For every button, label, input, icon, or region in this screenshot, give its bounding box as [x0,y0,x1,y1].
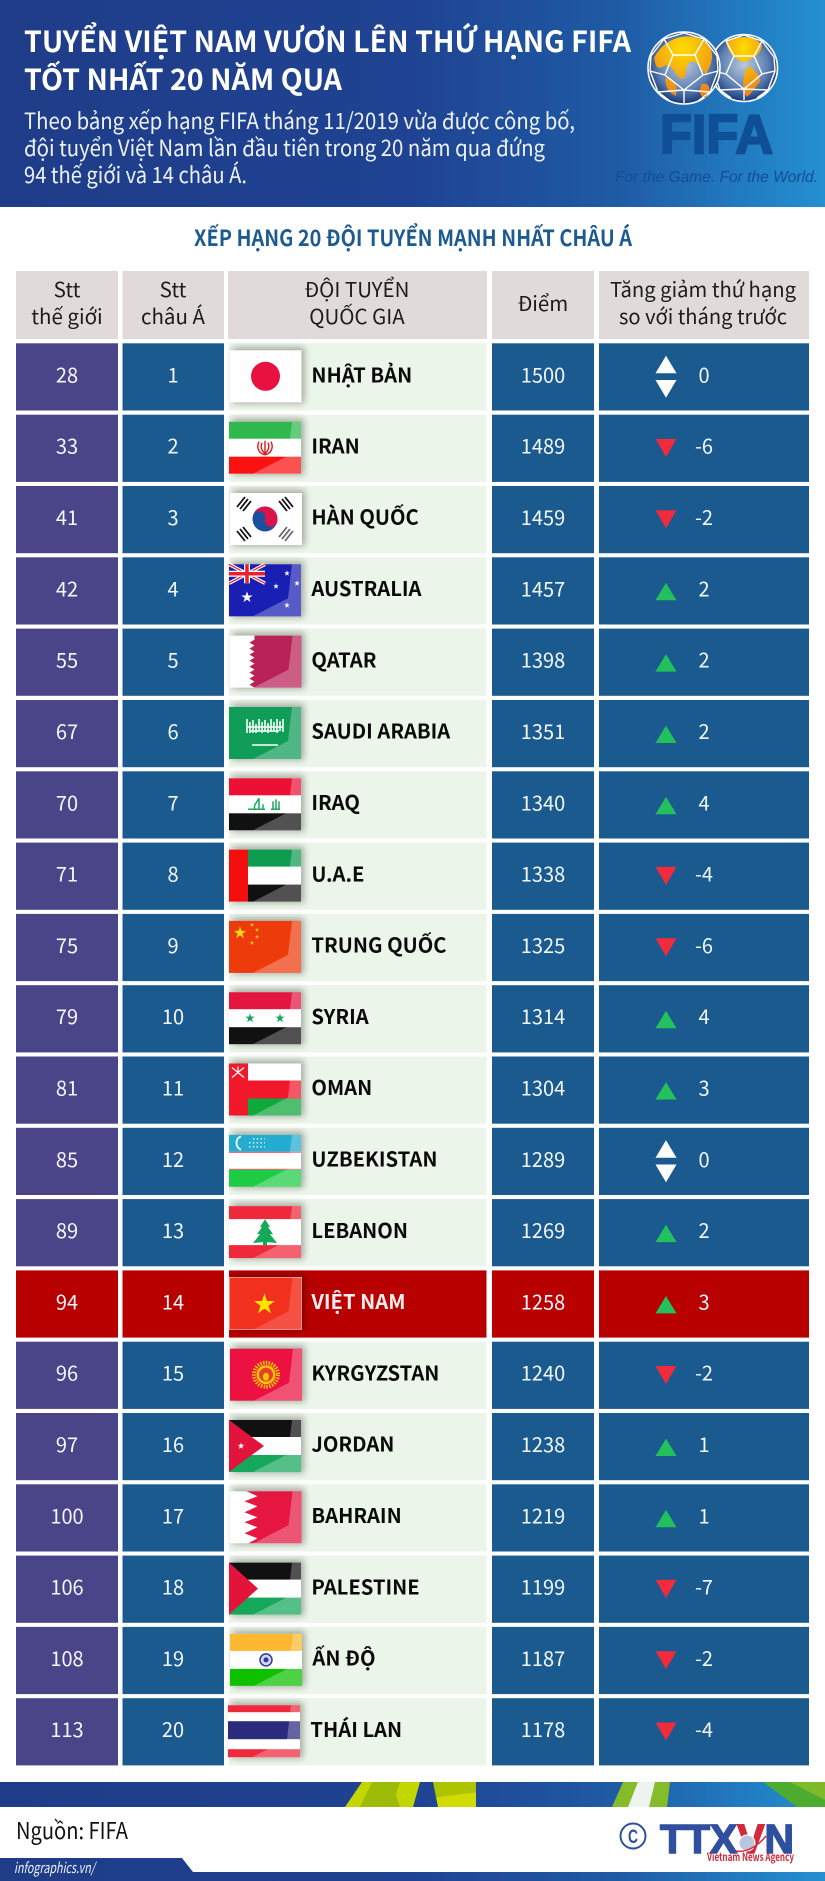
row: Qatar: 2 [698,645,710,674]
row: Iran [16,415,809,482]
row: Nhật Bản: 28 [56,359,78,388]
row: Iran: 1489 [521,431,565,460]
row: Uzbekistan: 12 [162,1144,184,1173]
bottom strip with site tab [0,1857,825,1881]
row: U.A.E: U.A.E [311,858,364,887]
table header: Stt [160,273,187,303]
row: Saudi Arabia [16,700,809,767]
flag: Jordan [229,1417,304,1473]
row: Uzbekistan: 85 [56,1144,78,1173]
row: Ấn Độ: 108 [50,1643,84,1672]
row: Oman: 81 [56,1072,78,1102]
row: Uzbekistan: UZBEKISTAN [311,1144,437,1173]
row: Iraq: 70 [56,787,78,816]
row: U.A.E: 71 [56,859,78,888]
agency name: Vietnam News Agency [706,1849,794,1865]
copyright mark [620,1824,646,1848]
arrow: up [656,1011,676,1028]
row: Nhật Bản: 0 [698,359,710,388]
table header: châu Á [141,300,205,330]
row: Ấn Độ: 1187 [521,1643,565,1672]
flag: Vietnam [230,1274,304,1330]
arrow: down [656,1722,676,1740]
row: Hàn Quốc: 1459 [521,502,565,531]
flag: UAE [229,847,304,903]
row: Qatar: QATAR [311,644,377,673]
row: Việt Nam (highlighted) [16,1270,809,1338]
row: Uzbekistan [16,1128,809,1195]
row: Australia: 4 [167,573,179,602]
arrow: up [656,1082,676,1100]
row: Iran: IRAN [311,430,360,459]
row: Syria: 1314 [521,1001,565,1030]
row: Trung Quốc: 1325 [521,930,565,959]
row: Trung Quốc: 9 [167,930,179,959]
row: Lebanon: 89 [56,1215,78,1244]
row: Bahrain: 17 [162,1500,184,1529]
title [24,19,631,99]
row: U.A.E: 8 [167,859,179,888]
row: Thái Lan: 20 [162,1714,184,1743]
row: Syria: 79 [56,1001,78,1030]
title: TỐT NHẤT 20 NĂM QUA [24,57,342,99]
row: Trung Quốc: TRUNG QUỐC [311,930,447,959]
arrow: up [656,1439,676,1456]
row: Việt Nam (highlighted): 94 [56,1286,78,1315]
row: Thái Lan [16,1698,809,1765]
arrow: down [656,1580,676,1598]
row: Thái Lan: THÁI LAN [310,1714,402,1743]
flag: Uzbekistan [229,1132,304,1188]
row: Lebanon [16,1199,809,1266]
row: Qatar: 1398 [521,645,565,674]
row: Jordan: 1 [698,1429,710,1458]
row: Thái Lan: 1178 [521,1714,565,1743]
row: Palestine: 106 [50,1572,84,1601]
row: Australia: 2 [698,573,710,602]
row: Jordan [16,1413,809,1480]
row: Nhật Bản: NHẬT BẢN [311,359,412,388]
row: Palestine: 18 [162,1572,184,1601]
row: Saudi Arabia: SAUDI ARABIA [311,716,451,745]
row: Iraq [16,771,809,838]
row: Palestine: 1199 [521,1572,565,1601]
FIFA slogan: For the Game. For the World. [615,169,818,186]
row: Palestine: PALESTINE [311,1571,420,1600]
row: Trung Quốc: -6 [695,930,713,959]
bottom strip with site tab: infographics.vn/ [14,1857,97,1878]
row: Australia: AUSTRALIA [310,573,423,602]
row: Trung Quốc [16,914,809,981]
row: Nhật Bản: 1500 [521,359,565,388]
flag: Syria [229,989,304,1045]
row: Nhật Bản [16,343,809,410]
row: Kyrgyzstan: KYRGYZSTAN [311,1357,439,1386]
row: Syria: 10 [162,1001,184,1030]
intro text: Theo bảng xếp hạng FIFA tháng 11/2019 vừa được công bố, [24,104,575,136]
intro text [24,104,575,190]
flag: Kyrgyzstan [230,1346,305,1402]
table header: so với tháng trước [619,300,787,330]
flag: Oman [229,1060,304,1116]
arrows: unchanged [656,1140,676,1182]
row: Hàn Quốc: 3 [167,502,179,531]
row: U.A.E: 1338 [521,859,565,888]
table header: Tăng giảm thứ hạng [610,273,796,303]
source text: Nguồn: FIFA [16,1812,128,1846]
row: Australia [16,557,809,624]
row: Qatar [16,629,809,696]
flag: Thailand [228,1702,303,1758]
row: Ấn Độ: -2 [695,1643,713,1672]
row: Iran: -6 [695,431,713,460]
row: Thái Lan: -4 [695,1714,713,1743]
row: Iraq: 1340 [521,787,565,816]
table header: Stt [54,273,81,303]
row: Bahrain: BAHRAIN [311,1500,402,1529]
row: Palestine [16,1556,809,1623]
row: Bahrain: 100 [50,1500,84,1529]
flag: Japan [230,347,304,403]
row: Iraq: IRAQ [311,787,360,816]
row: Việt Nam (highlighted): VIỆT NAM [310,1286,405,1315]
intro text: 94 thế giới và 14 châu Á. [24,158,247,190]
row: Hàn Quốc: 41 [56,502,78,531]
row: Saudi Arabia: 1351 [521,716,565,745]
row: Ấn Độ: ẤN ĐỘ [311,1643,376,1672]
row: U.A.E [16,843,809,910]
flag: Saudi Arabia [229,704,304,760]
title: TUYỂN VIỆT NAM VƯƠN LÊN THỨ HẠNG FIFA [24,19,631,61]
row: Qatar: 5 [167,645,179,674]
arrows: unchanged [656,356,676,398]
arrow: up [656,1296,676,1313]
arrow: down [656,510,676,528]
row: Oman [16,1056,809,1124]
row: Hàn Quốc: -2 [695,502,713,531]
row: Qatar: 55 [56,645,78,674]
arrow: down [656,938,676,956]
flag: Iran [229,419,304,475]
arrow: up [656,797,676,814]
flag: Palestine [229,1560,304,1616]
row: Jordan: 1238 [521,1429,565,1458]
row: Oman: 1304 [521,1072,565,1102]
table header: QUỐC GIA [309,300,405,330]
flag: India [230,1631,305,1687]
row: Việt Nam (highlighted): 1258 [521,1286,565,1315]
row: Oman: OMAN [311,1072,372,1101]
row: Jordan: JORDAN [311,1429,394,1458]
row: Syria [16,985,809,1052]
row: Saudi Arabia: 2 [698,716,710,745]
row: Việt Nam (highlighted): 14 [162,1286,184,1315]
row: Lebanon: 13 [162,1215,184,1244]
row: Kyrgyzstan: 96 [56,1358,78,1387]
arrow: down [656,867,676,885]
row: Ấn Độ: 19 [162,1643,184,1672]
icon: left globe [648,32,720,104]
row: Kyrgyzstan: 15 [162,1358,184,1387]
flag: Australia [229,561,304,617]
arrow: up [656,1225,676,1242]
icon: right globe [710,34,778,102]
row: Palestine: -7 [695,1572,713,1601]
row: Syria: 4 [698,1001,710,1030]
footer band with green shards [0,1782,825,1807]
row: Iraq: 4 [698,787,710,816]
flag: Qatar [230,633,304,689]
FIFA wordmark: FIFA [660,103,773,165]
row: Ấn Độ [16,1627,809,1694]
arrow: up [656,1510,676,1527]
row: Iran: 33 [56,431,78,460]
row: Oman: 3 [698,1072,710,1102]
row: Iran: 2 [167,431,179,460]
flag: Bahrain [230,1488,304,1544]
arrow: down [656,439,676,457]
row: Saudi Arabia: 67 [56,716,78,745]
icon: FIFA logo [615,32,818,186]
arrow: down [656,1651,676,1669]
flag: Iraq [229,775,304,831]
TTXVN wordmark: TTXVN [660,1816,794,1862]
flag: South Korea [230,490,305,546]
arrow: up [656,654,676,672]
section heading: XẾP HẠNG 20 ĐỘI TUYỂN MẠNH NHẤT CHÂU Á [194,221,633,253]
flag: China [229,918,304,974]
row: Jordan: 97 [56,1429,78,1458]
row: Saudi Arabia: 6 [167,716,179,745]
globe emblem [736,1835,766,1851]
row: Australia: 1457 [521,573,565,602]
row: Oman: 11 [162,1072,184,1102]
row: U.A.E: -4 [695,859,713,888]
row: Lebanon: 1269 [521,1215,565,1244]
table header [16,271,809,339]
table header: thế giới [31,300,103,330]
row: Bahrain [16,1484,809,1552]
row: Jordan: 16 [162,1429,184,1458]
row: Việt Nam (highlighted): 3 [698,1286,710,1315]
row: Kyrgyzstan: 1240 [521,1358,565,1387]
row: Uzbekistan: 0 [698,1144,710,1173]
row: Bahrain: 1219 [521,1500,565,1529]
row: Lebanon: 2 [698,1215,710,1244]
row: Kyrgyzstan [16,1342,809,1409]
row: Hàn Quốc: HÀN QUỐC [311,502,419,531]
row: Syria: SYRIA [311,1001,370,1030]
arrow: up [656,726,676,743]
row: Lebanon: LEBANON [311,1215,408,1244]
table header: Điểm [518,287,568,317]
copyright mark: C [628,1827,638,1848]
row: Australia: 42 [56,573,78,602]
icon: TTXVN logo [620,1816,794,1865]
row: Trung Quốc: 75 [56,930,78,959]
table header: ĐỘI TUYỂN [305,273,409,303]
row: Bahrain: 1 [698,1500,710,1529]
row: Iraq: 7 [167,787,179,816]
row: Nhật Bản: 1 [167,359,179,388]
header banner [0,0,825,207]
row: Kyrgyzstan: -2 [695,1358,713,1387]
intro text: đội tuyển Việt Nam lần đầu tiên trong 20 năm qua đứng [24,131,545,163]
row: Uzbekistan: 1289 [521,1144,565,1173]
row: Hàn Quốc [16,486,809,553]
arrow: up [656,583,676,600]
arrow: down [656,1366,676,1384]
row: Thái Lan: 113 [50,1714,84,1743]
flag: Lebanon [229,1203,304,1259]
